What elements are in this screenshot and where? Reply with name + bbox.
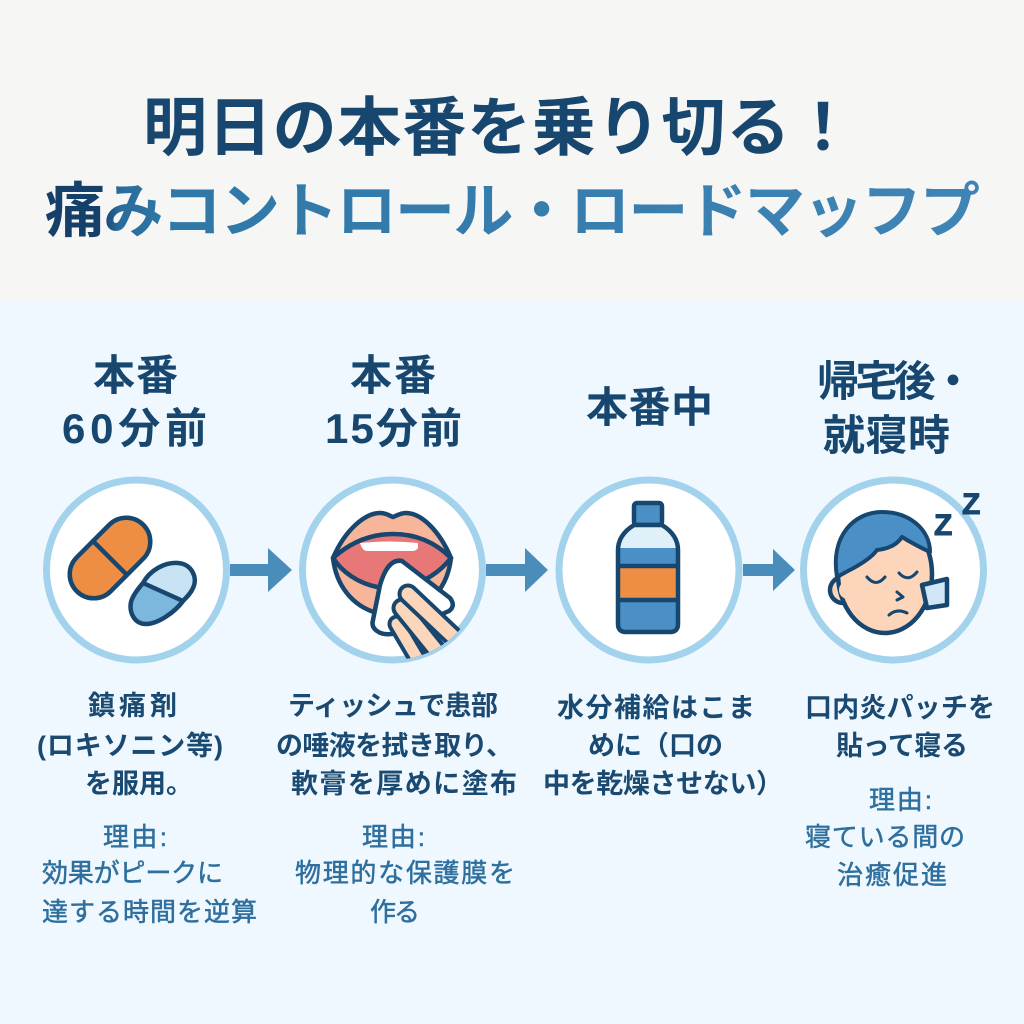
step 4 circle: sleeping face icon <box>804 480 984 660</box>
step 3 heading: 本番中 <box>586 384 713 431</box>
step 2 reason: 物理的な保護膜を <box>295 858 515 888</box>
icon: tissue and fingers <box>372 561 462 668</box>
header background <box>0 0 1024 301</box>
step 2 heading: 15分前 <box>325 405 462 452</box>
icon: sleep letters <box>934 488 980 542</box>
step 2 instruction: 軟膏を厚めに塗布 <box>291 769 517 799</box>
step 2 reason: 作る <box>370 897 420 927</box>
icon: sleep letters: Z <box>934 509 952 542</box>
icon: sleep letters: Z <box>962 488 980 521</box>
step 4 reason: 治癒促進 <box>837 860 947 890</box>
step 4 reason: 寝ている間の <box>805 822 965 852</box>
step 4 heading: 帰宅後・ <box>817 358 974 405</box>
step 1 instruction: (ロキソニン等) <box>37 731 223 761</box>
icon: blue tablet <box>131 563 195 624</box>
step 2 instruction: の唾液を拭き取り、 <box>276 731 513 761</box>
step 1 reason <box>42 822 257 927</box>
step 1 reason: 効果がピークに <box>42 858 223 888</box>
step 2 reason: 理由: <box>362 822 425 852</box>
arrow 2 <box>486 548 548 592</box>
step 2 circle: lips and tissue icon <box>302 480 482 668</box>
step 4 heading: 就寝時 <box>823 412 950 459</box>
step 1 circle: pills icon <box>46 480 226 660</box>
step 3 instruction: 中を乾燥させない） <box>543 769 783 799</box>
arrow 3 <box>743 549 795 591</box>
step 2 heading: 本番 <box>350 352 436 399</box>
step 3 instruction <box>543 693 783 799</box>
step 3: during the event <box>543 384 783 799</box>
step 4 instruction: 口内炎パッチを <box>805 693 995 723</box>
step 1 instruction: を服用。 <box>85 769 193 799</box>
step 1 heading <box>62 352 207 452</box>
step 3 circle: bottle icon <box>559 480 739 660</box>
step 2: 15 minutes before <box>276 352 517 927</box>
step 4 heading <box>817 358 974 459</box>
step 4: after returning home and at bedtime <box>804 358 995 890</box>
step 1 heading: 60分前 <box>62 405 207 452</box>
icon: water bottle <box>618 503 678 632</box>
step 4 instruction: 貼って寝る <box>836 731 968 761</box>
step 4 reason: 理由: <box>869 785 932 815</box>
step 2 reason <box>295 822 515 927</box>
step 2 instruction <box>276 691 517 799</box>
step 1 reason: 理由: <box>103 822 167 852</box>
arrow 1 <box>230 548 292 592</box>
icon: lips <box>333 513 451 613</box>
title line 1: 明日の本番を乗り切る！ <box>143 92 855 164</box>
step 3 instruction: めに（口の <box>588 731 723 761</box>
step 1 instruction: 鎮痛剤 <box>88 691 177 721</box>
step 1 heading: 本番 <box>93 352 178 399</box>
title <box>45 92 980 245</box>
step 4 reason <box>805 785 965 890</box>
step 4 instruction <box>805 693 995 761</box>
step 1 instruction <box>37 691 223 799</box>
icon: orange capsule <box>60 508 160 608</box>
main background <box>0 301 1024 1024</box>
step 2 heading <box>325 352 462 452</box>
icon: sleeping face <box>830 512 947 633</box>
step 2 instruction: ティッシュで患部 <box>288 691 498 721</box>
step 3 instruction: 水分補給はこま <box>557 693 755 723</box>
title line 2: 痛みコントロール・ロードマッフプ <box>45 178 980 245</box>
step 1: 60 minutes before <box>37 352 257 927</box>
step 1 reason: 達する時間を逆算 <box>42 897 257 927</box>
